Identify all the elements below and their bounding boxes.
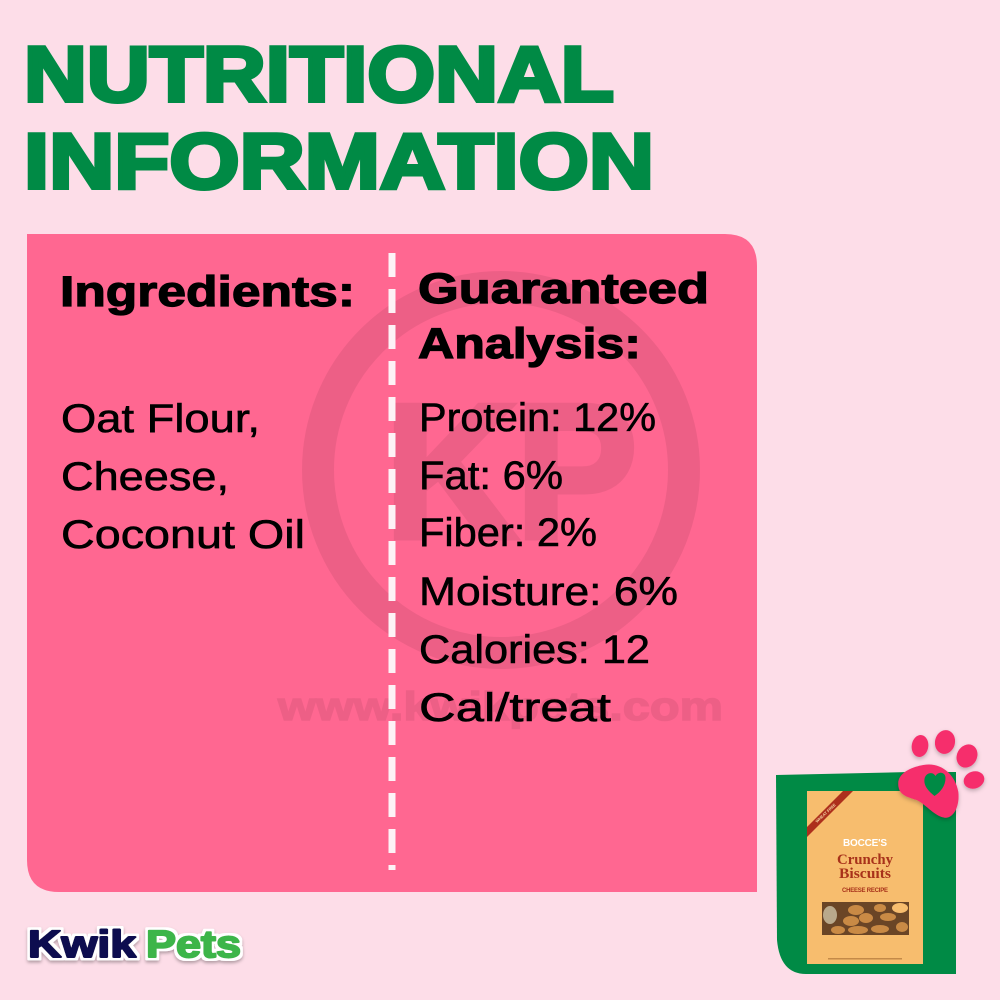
guaranteed analysis list: Fiber: 2% — [419, 511, 597, 555]
ingredients list: Coconut Oil — [61, 513, 305, 557]
guaranteed analysis list: Moisture: 6% — [419, 570, 678, 614]
bag footer — [828, 958, 902, 960]
ingredients list: Oat Flour, — [61, 397, 260, 441]
bag name — [837, 852, 893, 882]
logo: Kwik Pets: Pets — [146, 924, 241, 966]
ingredients list — [61, 397, 305, 557]
bag name: Biscuits — [839, 866, 891, 882]
heading: guaranteed analysis: Guaranteed — [418, 265, 709, 313]
ingredients list: Cheese, — [61, 455, 229, 499]
guaranteed analysis list: Fat: 6% — [419, 454, 563, 498]
icon: paw — [898, 728, 987, 818]
bag ribbon label: WHEAT FREE — [814, 802, 837, 824]
bag recipe: CHEESE RECIPE — [842, 888, 888, 894]
panel: nutrition card — [27, 234, 757, 892]
title: NUTRITIONAL — [24, 30, 614, 118]
guaranteed analysis list: Protein: 12% — [419, 396, 656, 440]
title — [24, 30, 654, 205]
bag name: Crunchy — [837, 852, 893, 868]
logo: Kwik Pets — [28, 924, 241, 966]
guaranteed analysis list: Cal/treat — [419, 686, 611, 730]
watermark: KP logo and url: www.kwikpets.com — [277, 685, 723, 729]
watermark: KP logo and url — [277, 287, 723, 729]
icon: paw heart — [924, 773, 946, 796]
bag brand: BOCCE'S — [843, 838, 887, 849]
bag corner ribbon — [807, 791, 853, 837]
column divider — [388, 253, 396, 870]
watermark: KP logo and url: KP — [385, 366, 637, 578]
product: treat bag — [807, 791, 923, 964]
heading: ingredients: Ingredients: — [60, 268, 355, 316]
bag window with biscuits — [822, 902, 909, 935]
heading: guaranteed analysis — [418, 265, 709, 368]
title: INFORMATION — [24, 117, 654, 205]
guaranteed analysis list: Calories: 12 — [419, 628, 650, 672]
heading: guaranteed analysis: Analysis: — [418, 320, 641, 368]
product: green backing — [776, 772, 956, 974]
guaranteed analysis list — [419, 396, 678, 730]
logo: Kwik Pets: Kwik — [28, 924, 137, 966]
